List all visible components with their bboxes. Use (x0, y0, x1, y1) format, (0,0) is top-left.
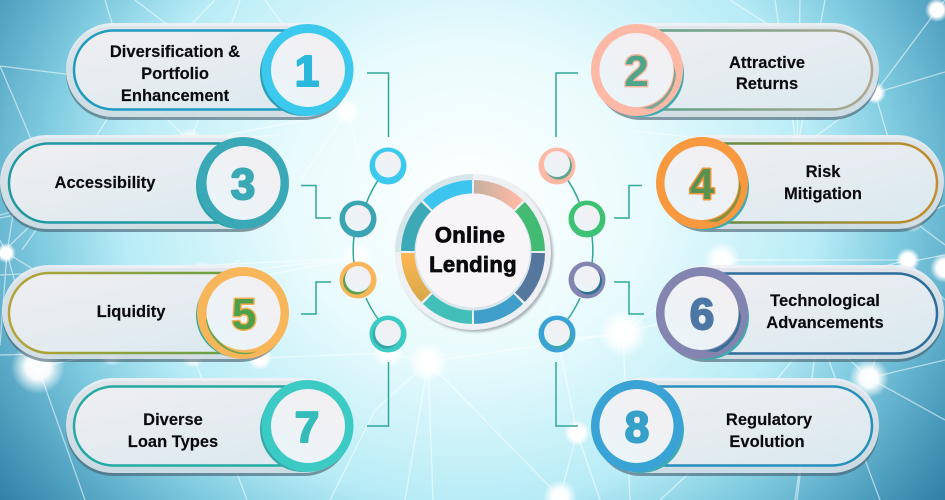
node 5 (340, 262, 376, 298)
label: Evolution (729, 433, 805, 451)
number badge 1 (260, 24, 354, 116)
label (766, 292, 884, 332)
label: Advancements (766, 314, 884, 332)
label: Diverse (143, 411, 203, 429)
label: Liquidity (97, 303, 166, 321)
label (729, 54, 805, 93)
node 2 (538, 148, 576, 184)
label: Mitigation (784, 185, 862, 203)
node 6 (568, 262, 606, 298)
connector lines (301, 73, 644, 426)
number badge 1: 1 (295, 47, 319, 96)
label: Regulatory (726, 411, 813, 429)
panel 7: Diverse Loan Types (66, 378, 354, 476)
label: Accessibility (55, 174, 156, 192)
number badge 5 (196, 267, 289, 359)
number badge 3 (196, 137, 289, 229)
label: Attractive (729, 54, 805, 72)
panel 2: Attractive Returns (591, 23, 879, 120)
label: Technological (770, 292, 880, 310)
panel 5: Liquidity (2, 265, 289, 362)
number badge 8 (591, 380, 684, 473)
label: Portfolio (141, 65, 209, 83)
number badge 2 (591, 24, 684, 117)
label (726, 411, 813, 451)
number badge 7 (260, 380, 354, 472)
number badge 6: 6 (690, 290, 714, 339)
number badge 7: 7 (295, 403, 319, 452)
label (784, 163, 862, 203)
node 3 (340, 200, 376, 238)
label: Enhancement (121, 87, 230, 105)
label (128, 411, 218, 451)
node 1 (370, 148, 406, 184)
panel 1: Diversification and Portfolio Enhancement (66, 23, 354, 120)
small node circles (340, 148, 606, 352)
label: Diversification & (110, 43, 240, 61)
number badge 2: 2 (624, 47, 649, 96)
label (110, 43, 240, 105)
ring arc connecting small circles (353, 176, 593, 319)
ring segments (408, 187, 538, 317)
hub title: Lending (429, 252, 517, 277)
number badge 6 (656, 267, 749, 360)
hub title (429, 222, 517, 277)
central hub: Online Lending (395, 174, 553, 332)
label: Risk (806, 163, 841, 181)
panel 4: Risk Mitigation (656, 135, 944, 232)
number badge 3: 3 (231, 160, 255, 209)
panel 6: Technological Advancements (656, 265, 944, 362)
number badge 8: 8 (625, 403, 649, 452)
panel 3: Accessibility (0, 135, 289, 232)
panel 8: Regulatory Evolution (591, 378, 879, 476)
hub title: Online (435, 222, 505, 248)
node 7 (370, 316, 406, 352)
node 8 (538, 316, 576, 352)
number badge 4: 4 (690, 160, 715, 209)
node 4 (568, 200, 606, 238)
number badge 4 (656, 137, 749, 230)
number badge 5: 5 (232, 290, 256, 339)
label: Returns (736, 75, 798, 93)
label: Loan Types (128, 433, 218, 451)
